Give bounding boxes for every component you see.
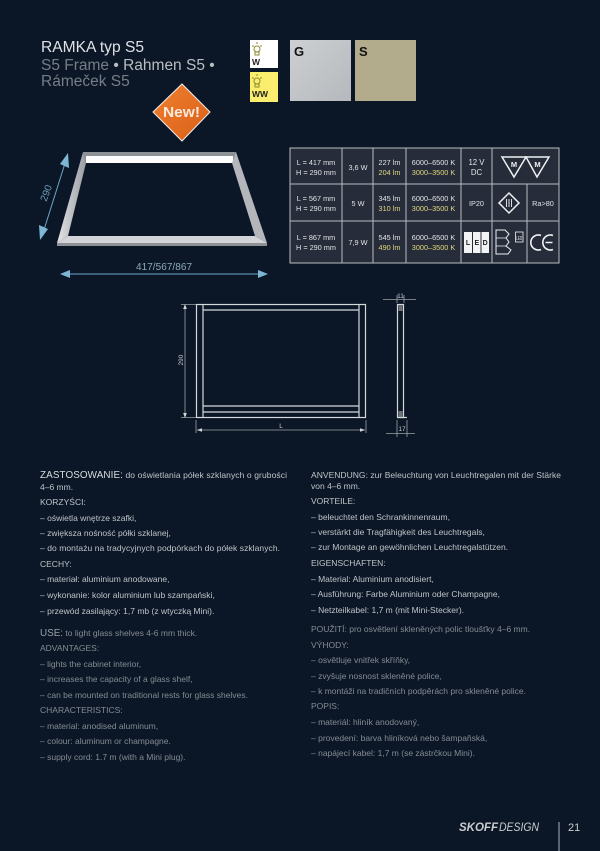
arrow: height 290: 290 (39, 183, 55, 203)
footer divider (558, 822, 560, 851)
specification table: 490 lm (379, 243, 400, 252)
text block: English: – can be mounted on traditional rests for glass shelves. (40, 690, 248, 700)
specification table: DC (471, 168, 482, 177)
text block: English: – colour: aluminum or champagne. (40, 736, 171, 746)
badge: New (153, 84, 210, 141)
title: S5 Frame • Rahmen S5 • (41, 57, 215, 74)
text block: Czech: POPIS: (311, 701, 339, 711)
text block: Polish: 4–6 mm. (40, 482, 73, 492)
icon: M triangles (502, 157, 549, 177)
icon: W light colour (250, 40, 278, 68)
text block: Czech: – napájecí kabel: 1,7 m (se zástrčkou Mini). (311, 748, 475, 758)
specification table: 6000–6500 K (412, 233, 455, 242)
text block: English: – supply cord: 1.7 m (with a Mini plug). (40, 752, 186, 762)
technical drawing: front view (178, 304, 366, 433)
technical drawing: side view: 17 (398, 426, 406, 433)
title (41, 39, 215, 90)
specification table: 3000–3500 K (412, 204, 455, 213)
swatch: G silver (290, 40, 351, 101)
swatch: S champagne: S (359, 44, 368, 59)
text block: Czech: – materiál: hliník anodovaný, (311, 717, 419, 727)
icon: CE mark (531, 235, 553, 250)
icon: WW light colour (250, 72, 278, 102)
specification table: IP20 (469, 199, 484, 208)
specification table: 227 lm (379, 158, 400, 167)
specification table: H = 290 mm (296, 243, 336, 252)
text block: German: – verstärkt die Tragfähigkeit des Leuchtregals, (311, 527, 485, 537)
text block: German: von 4–6 mm. (311, 481, 360, 491)
text block: Polish: – wykonanie: kolor aluminium lub szampański, (40, 590, 215, 600)
icon: class III diamond (499, 193, 519, 213)
footer logo: SKOFF (459, 822, 499, 834)
icon: W light colour: W (252, 57, 261, 67)
specification table: Ra>80 (532, 199, 554, 208)
text block: Polish: KORZYŚCI: (40, 496, 86, 507)
text block: Czech: – zvyšuje nosnost skleněné police, (311, 671, 442, 681)
specification table: L = 867 mm (297, 233, 335, 242)
text block: Czech: – provedení: barva hliníková nebo šampaňská, (311, 733, 487, 743)
technical drawing: side view (383, 293, 416, 437)
specification table: 12 V (468, 158, 485, 167)
text block: German: – zur Montage an gewöhnlichen Leuchtregalstützen. (311, 542, 508, 552)
specification table: 345 lm (379, 194, 400, 203)
text block: Czech: – osvětluje vnitřek skříňky, (311, 655, 410, 665)
text block: Polish: ZASTOSOWANIE: do oświetlania półek szklanych o grubości (40, 470, 287, 481)
text block: Czech: VÝHODY: (311, 640, 349, 650)
icon: LED blocks (464, 232, 489, 253)
text block: German: – beleuchtet den Schrankinnenraum, (311, 512, 450, 522)
specification table (290, 148, 559, 263)
specification table: 5 W (352, 199, 365, 208)
specification table: 204 lm (379, 168, 400, 177)
title: Rámeček S5 (41, 73, 130, 90)
footer logo: DESIGN (499, 820, 539, 834)
specification table: H = 290 mm (296, 168, 336, 177)
arrow: height 290 (39, 153, 69, 240)
text block: Czech: – k montáži na tradičních podpěrách pro skleněné police. (311, 686, 526, 696)
arrow: width 417/567/867: 417/567/867 (136, 262, 192, 273)
text block: Polish: – zwiększa nośność półki szklanej, (40, 528, 171, 538)
text block: Polish (40, 470, 287, 616)
product photo: frame (57, 152, 267, 246)
icon: energy class LED (496, 230, 523, 254)
specification table: 6000–6500 K (412, 158, 455, 167)
technical drawing: side view: 11 (397, 293, 404, 300)
icon: energy class LED: LED (516, 236, 522, 242)
text block: German: – Netzteilkabel: 1,7 m (mit Mini-Stecker). (311, 605, 464, 615)
text block: English: USE: to light glass shelves 4-6 mm thick. (40, 628, 197, 639)
text block: English: ADVANTAGES: (40, 643, 99, 653)
text block: Czech: POUŽITÍ: pro osvětlení skleněných polic tloušťky 4–6 mm. (311, 624, 530, 634)
specification table: 545 lm (379, 233, 400, 242)
footer logo (459, 820, 539, 834)
icon: LED blocks: L (466, 240, 471, 247)
text block: German: – Material: Aluminium anodisiert, (311, 574, 434, 584)
specification table: L = 567 mm (297, 194, 335, 203)
text block: English: – increases the capacity of a glass shelf, (40, 674, 193, 684)
icon: M triangles: M (511, 160, 517, 169)
specification table: 3,6 W (348, 163, 368, 172)
page number: 21 (568, 822, 580, 834)
text block: Polish: – przewód zasilający: 1,7 mb (z wtyczką Mini). (40, 606, 214, 616)
text block: Czech (311, 624, 530, 758)
text block: English: – lights the cabinet interior, (40, 659, 141, 669)
text block: German: EIGENSCHAFTEN: (311, 558, 386, 568)
specification table: L = 417 mm (297, 158, 335, 167)
text block: Polish: CECHY: (40, 559, 72, 569)
specification table: 310 lm (379, 204, 400, 213)
text block: German: – Ausführung: Farbe Aluminium oder Champagne, (311, 589, 500, 599)
text block: German: ANVENDUNG: zur Beleuchtung von Leuchtregalen mit der Stärke (311, 470, 561, 480)
swatch: G silver: G (294, 44, 304, 59)
icon: M triangles: M (534, 160, 541, 169)
icon: WW light colour: WW (252, 89, 269, 99)
swatch: S champagne (355, 40, 416, 101)
text block: German: VORTEILE: (311, 496, 355, 506)
specification table: 3000–3500 K (412, 168, 455, 177)
badge: New: New! (163, 105, 200, 121)
text block: Polish: – materiał: aluminium anodowane, (40, 574, 169, 584)
technical drawing: front view: L (279, 423, 283, 430)
title: RAMKA typ S5 (41, 39, 144, 56)
text block: English: CHARACTERISTICS: (40, 705, 123, 715)
specification table: 6000–6500 K (412, 194, 455, 203)
icon: LED blocks: D (483, 240, 488, 247)
specification table: 3000–3500 K (412, 243, 455, 252)
text block: Polish: – oświetla wnętrze szafki, (40, 513, 136, 523)
specification table: 7,9 W (348, 238, 368, 247)
specification table: H = 290 mm (296, 204, 336, 213)
text block: English: – material: anodised aluminum, (40, 721, 158, 731)
text block: Polish: – do montażu na tradycyjnych podpórkach do półek szklanych. (40, 543, 280, 553)
arrow: width 417/567/867 (60, 262, 268, 278)
text block: German (311, 470, 561, 615)
icon: LED blocks: E (474, 240, 479, 247)
technical drawing: front view: 290 (178, 354, 185, 365)
text block: English (40, 628, 248, 762)
